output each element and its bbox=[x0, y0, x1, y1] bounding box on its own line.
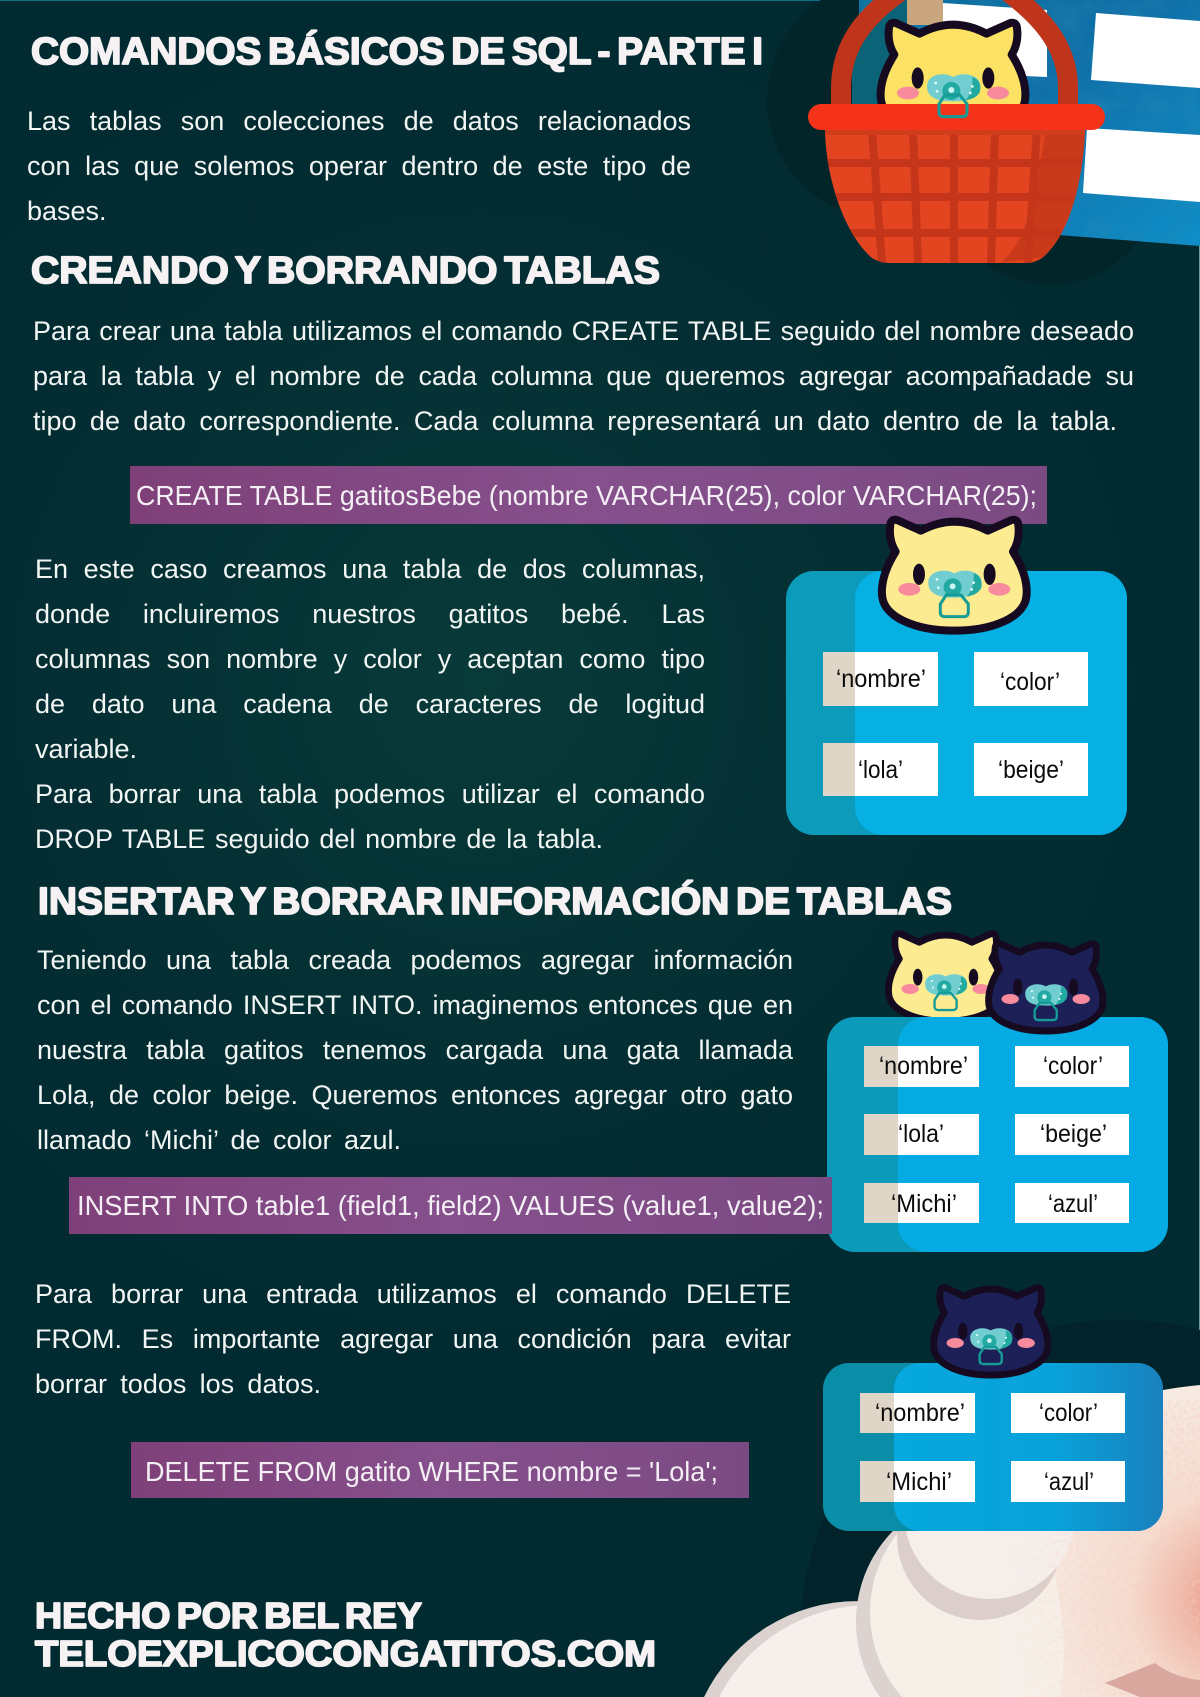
table diagram: after delete: ‘nombre’ bbox=[875, 1399, 965, 1427]
text block: insert explanation: con el comando INSERT INTO. imaginemos entonces que en bbox=[37, 990, 793, 1020]
table diagram: kittens with Michi bbox=[827, 1017, 1168, 1252]
text block: example explanation: donde incluiremos nuestros gatitos bebé. Las bbox=[35, 599, 705, 629]
table diagram: kitten table: ‘color’ bbox=[1000, 668, 1060, 696]
decoration: cloud bbox=[704, 1385, 1200, 1697]
code bar: insert into bbox=[69, 1177, 832, 1234]
text block: example explanation: DROP TABLE seguido del nombre de la tabla. bbox=[35, 824, 603, 854]
heading: creating and dropping tables: CREANDO Y BORRANDO TABLAS bbox=[31, 250, 660, 292]
text block: example explanation: En este caso creamos una tabla de dos columnas, bbox=[35, 554, 705, 584]
text block: insert explanation bbox=[37, 945, 794, 1155]
text block: create table explanation: para la tabla y el nombre de cada columna que queremos agregar acompañadade su bbox=[33, 361, 1134, 391]
credits bbox=[35, 1595, 656, 1674]
code bar: create table: CREATE TABLE gatitosBebe (nombre VARCHAR(25), color VARCHAR(25); bbox=[136, 480, 1037, 511]
text block: delete explanation: Para borrar una entrada utilizamos el comando DELETE bbox=[35, 1279, 791, 1309]
table diagram: after delete: ‘Michi’ bbox=[886, 1468, 952, 1496]
text block: example explanation bbox=[35, 554, 705, 854]
code bar: delete from: DELETE FROM gatito WHERE nombre = 'Lola'; bbox=[145, 1456, 718, 1487]
text block: intro: con las que solemos operar dentro de este tipo de bbox=[27, 151, 691, 181]
text block: delete explanation: borrar todos los datos. bbox=[35, 1369, 321, 1399]
table diagram: kittens with Michi: ‘Michi’ bbox=[891, 1190, 957, 1218]
table diagram: kitten table: ‘nombre’ bbox=[836, 665, 926, 693]
credits: HECHO POR BEL REY bbox=[35, 1595, 422, 1636]
table diagram: kittens with Michi: ‘azul’ bbox=[1048, 1190, 1098, 1218]
text block: intro: Las tablas son colecciones de datos relacionados bbox=[27, 106, 691, 136]
text block: insert explanation: Teniendo una tabla creada podemos agregar información bbox=[37, 945, 793, 975]
code bar: create table bbox=[130, 466, 1047, 524]
icon: navy kitten bbox=[989, 944, 1103, 1031]
table diagram: kitten table: ‘beige’ bbox=[998, 756, 1064, 784]
code bar: delete from bbox=[131, 1442, 749, 1498]
title: COMANDOS BÁSICOS DE SQL - PARTE I bbox=[31, 29, 763, 73]
credits: TELOEXPLICOCONGATITOS.COM bbox=[35, 1633, 656, 1674]
text block: insert explanation: Lola, de color beige. Queremos entonces agregar otro gato bbox=[37, 1080, 793, 1110]
table diagram: kitten table bbox=[786, 571, 1127, 835]
heading: inserting and deleting data: INSERTAR Y BORRAR INFORMACIÓN DE TABLAS bbox=[38, 879, 952, 923]
text block: delete explanation bbox=[35, 1279, 791, 1399]
text block: intro: bases. bbox=[27, 196, 107, 226]
text block: insert explanation: nuestra tabla gatitos tenemos cargada una gata llamada bbox=[37, 1035, 793, 1065]
decoration: blue paper with white stripes bbox=[859, 0, 1200, 246]
text block: example explanation: columnas son nombre y color y aceptan como tipo bbox=[35, 644, 705, 674]
table diagram: kittens with Michi: ‘beige’ bbox=[1040, 1120, 1107, 1148]
decoration: shadows behind basket bbox=[767, 0, 1160, 285]
table diagram: after delete bbox=[823, 1363, 1163, 1531]
table diagram: kittens with Michi: ‘color’ bbox=[1043, 1052, 1103, 1080]
text block: example explanation: de dato una cadena de caracteres de logitud bbox=[35, 689, 705, 719]
text block: delete explanation: FROM. Es importante agregar una condición para evitar bbox=[35, 1324, 791, 1354]
text block: create table explanation: tipo de dato correspondiente. Cada columna representará un dato dentro de la tabla. bbox=[33, 406, 1117, 436]
table diagram: kittens with Michi: ‘nombre’ bbox=[879, 1052, 968, 1080]
icon: yellow kitten behind table bbox=[888, 934, 1003, 1021]
icon: yellow kitten bbox=[882, 520, 1027, 631]
code bar: insert into: INSERT INTO table1 (field1, field2) VALUES (value1, value2); bbox=[77, 1190, 824, 1221]
text block: example explanation: Para borrar una tabla podemos utilizar el comando bbox=[35, 779, 705, 809]
table diagram: kittens with Michi: ‘lola’ bbox=[898, 1120, 944, 1148]
table diagram: after delete: ‘color’ bbox=[1039, 1399, 1098, 1427]
table diagram: kitten table: ‘lola’ bbox=[858, 756, 903, 784]
text block: create table explanation: Para crear una tabla utilizamos el comando CREATE TABLE seguido del nombre deseado bbox=[33, 316, 1134, 346]
table diagram: after delete: ‘azul’ bbox=[1044, 1468, 1094, 1496]
text block: create table explanation bbox=[33, 316, 1134, 436]
text block: example explanation: variable. bbox=[35, 734, 137, 764]
illustration: kitten in red basket bbox=[808, 0, 1105, 263]
cloud backdrop shadow bbox=[800, 1320, 1200, 1697]
icon: navy kitten alone bbox=[934, 1288, 1048, 1375]
text block: insert explanation: llamado ‘Michi’ de color azul. bbox=[37, 1125, 401, 1155]
text block: intro bbox=[27, 106, 691, 226]
